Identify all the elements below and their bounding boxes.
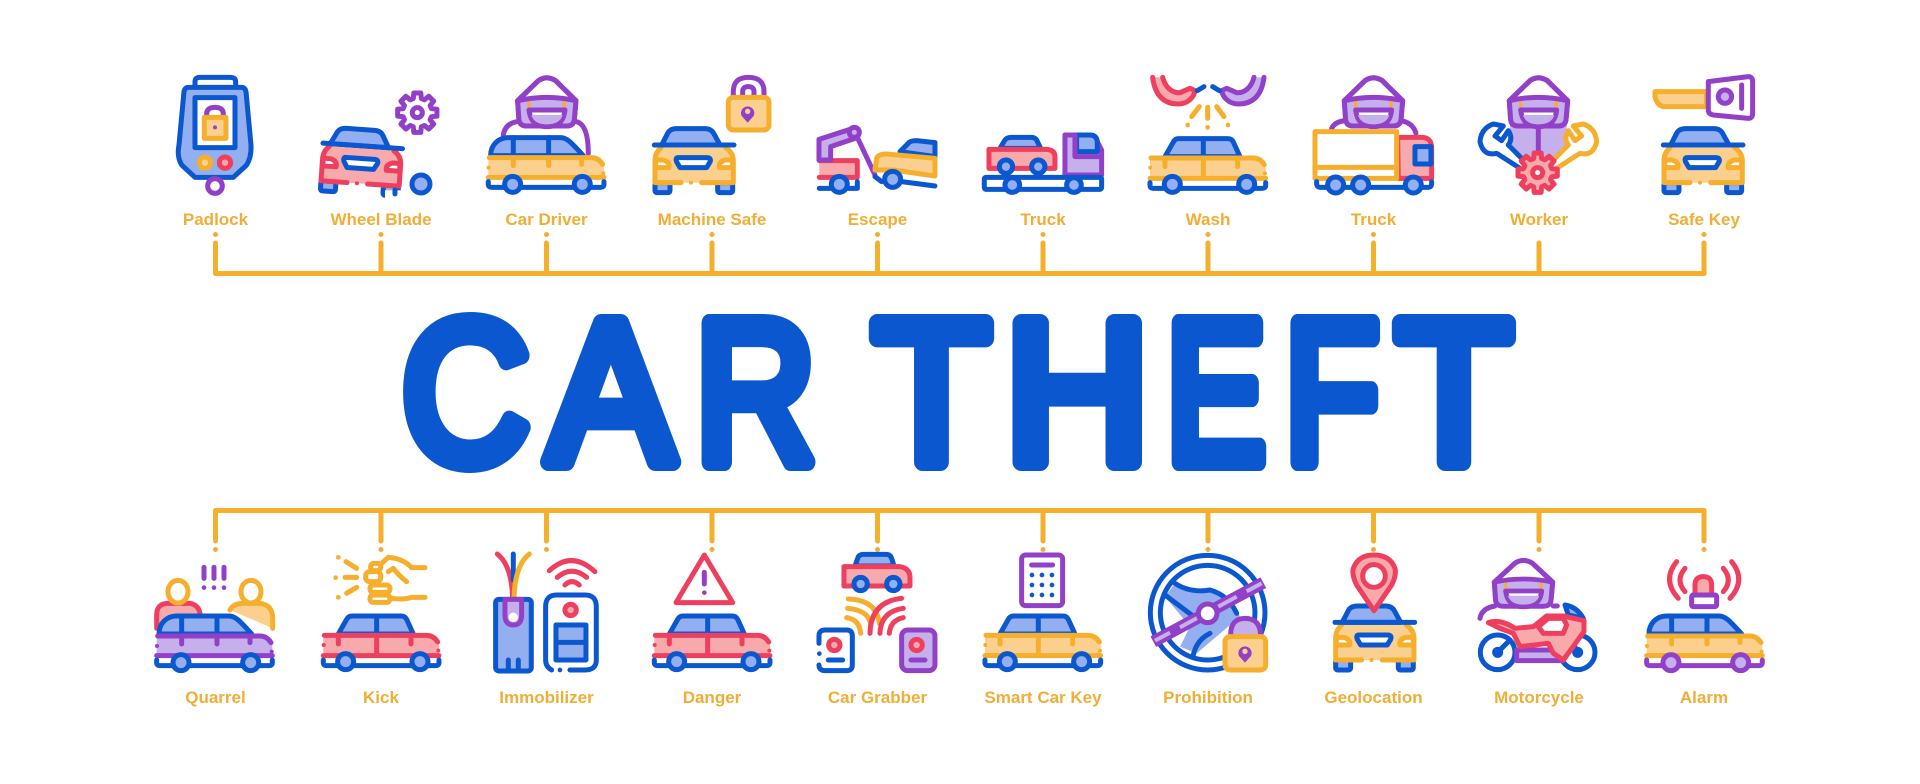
label: Safe Key (1668, 210, 1740, 229)
title: H (1005, 279, 1149, 505)
icon: immobilizer chip and key fob (496, 554, 596, 672)
label: Immobilizer (499, 688, 594, 707)
label: Machine Safe (658, 210, 766, 229)
item: Smart Car Key (983, 555, 1102, 707)
label: Car Driver (505, 210, 588, 229)
item: Quarrel (155, 567, 274, 707)
item: Geolocation (1324, 555, 1423, 707)
label: Car Grabber (828, 688, 927, 707)
item: Motorcycle (1480, 560, 1595, 707)
title: A (548, 279, 674, 505)
item: Car Grabber (817, 554, 935, 707)
icon: keypad over car (983, 555, 1102, 670)
item: Immobilizer (496, 554, 596, 707)
icon: thief behind car (487, 78, 605, 192)
title: E (1166, 279, 1266, 505)
label: Prohibition (1163, 688, 1253, 707)
item: Padlock (178, 77, 251, 229)
icon: car with lock (654, 77, 769, 193)
icon: car with removed wheel (320, 93, 437, 199)
label: Smart Car Key (984, 688, 1102, 707)
item: Safe Key (1655, 77, 1753, 229)
bottom connector (213, 510, 1706, 552)
icon: car with siren (1645, 562, 1764, 671)
label: Truck (1020, 210, 1066, 229)
item: Truck (thief) (1315, 78, 1432, 229)
icon: fist punching car (322, 555, 440, 670)
icon: car with key (1655, 77, 1753, 193)
title: T (873, 279, 990, 505)
title: T (1396, 279, 1512, 505)
title: F (1285, 279, 1379, 505)
label: Danger (683, 688, 742, 707)
item: Escape (819, 127, 935, 229)
icon: warning triangle over car (653, 555, 771, 670)
icon: car under spray hoses (1148, 77, 1267, 192)
item: Kick (322, 555, 440, 707)
top connector (213, 232, 1706, 274)
label: Geolocation (1324, 688, 1423, 707)
item: Machine Safe (654, 77, 769, 229)
label: Motorcycle (1494, 688, 1584, 707)
item: Danger (653, 555, 771, 707)
label: Quarrel (185, 688, 246, 707)
icon: locked steering wheel (1150, 555, 1266, 670)
icon: flatbed truck with car (984, 135, 1102, 192)
label: Alarm (1680, 688, 1728, 707)
label: Truck (1351, 210, 1397, 229)
label: Wheel Blade (330, 210, 432, 229)
icon: car and signal grabbers (817, 554, 935, 671)
item: Truck (flatbed) (984, 135, 1102, 229)
icon: thief behind truck (1315, 78, 1432, 193)
item: Alarm (1645, 562, 1764, 707)
title: R (695, 279, 816, 505)
item: Wash (1148, 77, 1267, 229)
item: Car Driver (487, 78, 605, 229)
item: Wheel Blade (320, 93, 437, 229)
item: Worker (1480, 78, 1597, 229)
icon: map pin over car (1335, 555, 1415, 670)
title: C (402, 279, 530, 505)
item: Prohibition (1150, 555, 1266, 707)
icon: key fob with padlock (178, 77, 251, 193)
icon: two people arguing by car (155, 567, 274, 671)
icon: tow truck lifting car (819, 127, 935, 192)
label: Kick (363, 688, 399, 707)
icon: thief on motorcycle (1480, 560, 1595, 670)
label: Escape (848, 210, 907, 229)
label: Worker (1510, 210, 1569, 229)
label: Wash (1186, 210, 1230, 229)
icon: thief with wrenches and gear (1480, 78, 1597, 192)
label: Padlock (183, 210, 249, 229)
